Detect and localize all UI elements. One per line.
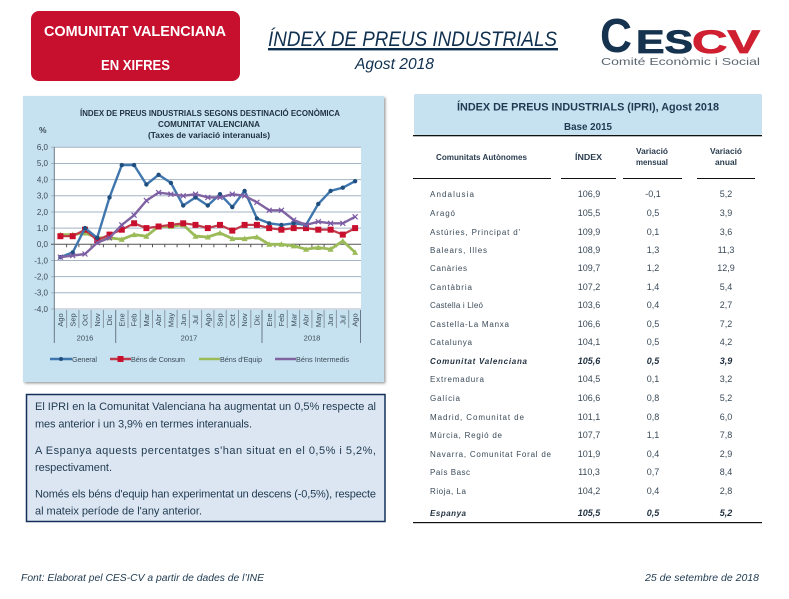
series: Béns d'Equip: [60, 225, 355, 252]
row: Aragó: 105,5: [578, 208, 600, 218]
row: Madrid: 101,1: [578, 412, 600, 422]
x axis month labels: Ago: [56, 313, 65, 327]
row: Múrcia: 7,8: [720, 430, 732, 440]
row: Astúries: [430, 227, 732, 237]
legend: Béns Intermedis: [296, 355, 349, 364]
x axis month labels: Jun: [179, 314, 188, 326]
row: Astúries: Astúries, Principat d': [430, 228, 520, 237]
y axis labels: 3,0: [37, 192, 49, 200]
row: Aragó: 3,9: [720, 208, 732, 218]
row: Comunitat Valenciana: 105,6: [578, 356, 601, 366]
row: País Basc: [430, 467, 732, 477]
series: Béns de Consum: [60, 223, 355, 240]
y axis labels: -1,0: [34, 256, 49, 266]
series: Béns Intermedis: [60, 193, 355, 257]
logo: CES CV: [600, 10, 761, 68]
date: 25 de setembre de 2018: [644, 572, 759, 584]
row: Espanya: 0,5: [647, 508, 660, 518]
row: Espanya: Espanya: [430, 509, 467, 518]
chart title: ÍNDEX DE PREUS INDUSTRIALS SEGONS DESTINACIÓ ECONÒMICA: [80, 109, 340, 118]
y axis labels: 4,0: [37, 176, 49, 184]
legend: [50, 355, 349, 364]
row: Castella-La Manxa: Castella-La Manxa: [430, 320, 510, 329]
row: País Basc: País Basc: [430, 468, 470, 477]
row: Balears: 1,3: [647, 245, 659, 255]
row: Extremadura: 3,2: [720, 374, 732, 384]
x axis month labels: Jul: [338, 315, 347, 325]
y axis labels: -4,0: [34, 305, 49, 314]
row: Comunitat Valenciana: 3,9: [720, 356, 732, 366]
table heading: [413, 94, 762, 136]
row: Aragó: [430, 208, 732, 218]
x axis month labels: Feb: [277, 314, 286, 326]
x axis month labels: Ago: [351, 313, 360, 327]
row: Andalusia: 106,9: [578, 189, 600, 199]
row: Aragó: Aragó: [430, 209, 456, 218]
title: [268, 28, 558, 73]
x axis month labels: Feb: [130, 314, 139, 326]
text block: summary: respectivament.: [35, 462, 112, 474]
row: Comunitat Valenciana: Comunitat Valenciana: [430, 357, 528, 366]
row: Espanya: 5,2: [720, 508, 732, 518]
text block: summary: [26, 394, 385, 522]
badge: Comunitat Valenciana en xifres: [31, 11, 240, 81]
row: Navarra: Navarra, Comunitat Foral de: [430, 450, 552, 459]
row: Aragó: 0,5: [647, 208, 659, 218]
row: Múrcia: 1,1: [647, 430, 659, 440]
row: Navarra: 0,4: [647, 449, 659, 459]
row: Rioja: [430, 486, 732, 496]
row: Madrid: [430, 412, 732, 422]
row: Múrcia: 107,7: [578, 430, 600, 440]
row: Andalusia: -0,1: [645, 189, 661, 199]
row: Balears: 11,3: [718, 245, 734, 255]
row: Comunitat Valenciana: [430, 356, 732, 366]
row: Castella i Lleó: 103,6: [578, 300, 600, 310]
y axis labels: 0,0: [37, 240, 49, 249]
y axis labels: 1,0: [37, 224, 49, 233]
x axis month labels: [56, 313, 360, 327]
column headers: [413, 147, 755, 179]
x axis month labels: Sep: [68, 313, 77, 327]
panel: line chart: [23, 96, 384, 382]
row: Galícia: 0,8: [647, 393, 659, 403]
x axis month labels: Oct: [228, 313, 237, 326]
row: Extremadura: 104,5: [578, 374, 600, 384]
x axis year labels: [77, 334, 320, 342]
row: Madrid: 6,0: [720, 412, 732, 422]
x axis month labels: Dic: [105, 314, 114, 325]
x axis month labels: Ago: [203, 313, 212, 327]
row: Castella-La Manxa: 0,5: [647, 319, 659, 329]
y axis labels: 2,0: [37, 208, 49, 217]
row: Balears: [430, 245, 734, 255]
text block: summary: al mateix període de l'any anterior.: [35, 506, 202, 518]
row: Navarra: [430, 449, 732, 459]
chart title: COMUNITAT VALENCIANA: [158, 120, 260, 129]
row: Castella i Lleó: 0,4: [647, 300, 659, 310]
row: País Basc: 8,4: [720, 467, 732, 477]
row: Cantàbria: 5,4: [720, 282, 732, 292]
row: Extremadura: 0,1: [647, 374, 659, 384]
row: Castella i Lleó: [430, 300, 732, 310]
y axis labels: -2,0: [34, 272, 49, 282]
x axis month labels: Abr: [154, 314, 163, 326]
row: Navarra: 2,9: [720, 449, 732, 459]
row: Catalunya: [430, 337, 732, 347]
row: Canàries: 109,7: [578, 263, 600, 273]
row: Rioja: 104,2: [578, 486, 600, 496]
row: Cantàbria: 107,2: [578, 282, 600, 292]
row: País Basc: 110,3: [578, 467, 600, 477]
row: Comunitat Valenciana: 0,5: [647, 356, 660, 366]
row: Rioja: 0,4: [647, 486, 659, 496]
text block: summary: El IPRI en la Comunitat Valenciana ha augmentat un 0,5% respecte al: [35, 401, 376, 413]
row: Balears: 108,9: [578, 245, 600, 255]
row: Catalunya: 104,1: [578, 337, 600, 347]
chart title: [80, 109, 340, 140]
row: Rioja: 2,8: [720, 486, 732, 496]
title: Agost 2018: [354, 56, 434, 73]
logo: CES CV: CV: [692, 24, 761, 60]
row: Canàries: [430, 263, 735, 273]
row: Canàries: 1,2: [647, 263, 659, 273]
x axis month labels: May: [314, 313, 323, 327]
row: Catalunya: 0,5: [647, 337, 659, 347]
row: Múrcia: [430, 430, 732, 440]
legend: General: [72, 355, 97, 364]
row: Canàries: 12,9: [717, 263, 735, 273]
row: Astúries: 109,9: [578, 227, 600, 237]
row: Cantàbria: Cantàbria: [430, 283, 473, 292]
row: Madrid: Madrid, Comunitat de: [430, 413, 525, 422]
row: Castella-La Manxa: 106,6: [578, 319, 600, 329]
axis unit: %: [39, 125, 47, 135]
text block: summary: Només els béns d'equip han experimentat un descens (-0,5%), respecte: [35, 488, 376, 500]
title: ÍNDEX DE PREUS INDUSTRIALS: [268, 28, 557, 51]
x axis month labels: Jul: [191, 315, 200, 325]
badge: Comunitat Valenciana en xifres: EN XIFRES: [101, 57, 170, 74]
x axis month labels: Sep: [216, 313, 225, 327]
chart title: (Taxes de variació interanuals): [148, 131, 270, 140]
row: Astúries: 0,1: [647, 227, 659, 237]
x axis month labels: Mar: [142, 313, 151, 326]
row: Extremadura: [430, 374, 732, 384]
column headers: Variació: [636, 147, 668, 156]
row: Canàries: Canàries: [430, 264, 467, 273]
table heading: ÍNDEX DE PREUS INDUSTRIALS (IPRI), Agost 2018: [457, 100, 719, 114]
row: País Basc: 0,7: [647, 467, 659, 477]
row: Galícia: [430, 393, 732, 403]
plot area: [54, 147, 361, 310]
column headers: Comunitats Autònomes: [436, 153, 528, 162]
text block: summary: A Espanya aquests percentatges s'han situat en el 0,5% i 5,2%,: [35, 445, 376, 457]
logo: CES CV: ES: [636, 24, 693, 60]
column headers: anual: [715, 158, 737, 167]
series: General: [60, 165, 355, 257]
row: Castella i Lleó: Castella i Lleó: [430, 301, 484, 310]
column headers: mensual: [636, 158, 668, 167]
row: Cantàbria: [430, 282, 732, 292]
source note: Font: Elaborat pel CES-CV a partir de dades de l’INE: [21, 572, 265, 584]
x axis month labels: Nov: [93, 313, 102, 327]
legend: Béns de Consum: [131, 355, 185, 364]
row: Catalunya: Catalunya: [430, 338, 473, 347]
y axis labels: [34, 143, 49, 314]
y axis labels: 5,0: [37, 159, 49, 168]
x axis month labels: Ene: [117, 313, 126, 327]
row: Múrcia: Múrcia, Regió de: [430, 431, 503, 440]
x axis month labels: Mar: [289, 313, 298, 326]
row: Balears: Balears, Illes: [430, 246, 487, 255]
logo: CES CV: Comité Econòmic i Social: [601, 56, 760, 68]
row: Andalusia: 5,2: [720, 189, 732, 199]
row: Castella-La Manxa: 7,2: [720, 319, 732, 329]
x axis month labels: Dic: [252, 314, 262, 325]
x axis month labels: May: [166, 313, 176, 327]
y axis labels: -3,0: [34, 288, 49, 298]
x axis year labels: 2017: [181, 334, 197, 342]
badge: Comunitat Valenciana en xifres: COMUNITAT VALENCIANA: [44, 23, 226, 40]
x axis month labels: Nov: [240, 313, 249, 327]
row: Andalusia: [430, 189, 732, 199]
row: Madrid: 0,8: [647, 412, 659, 422]
row: Extremadura: Extremadura: [430, 375, 485, 384]
row: Catalunya: 4,2: [720, 337, 732, 347]
row: Andalusia: Andalusia: [430, 190, 475, 199]
row: Cantàbria: 1,4: [647, 282, 659, 292]
row: Espanya: 105,5: [578, 508, 601, 518]
x axis month labels: Ene: [265, 313, 274, 327]
row: Rioja: Rioja, La: [430, 487, 467, 496]
x axis month labels: Abr: [302, 314, 311, 326]
legend: Béns d'Equip: [220, 355, 262, 364]
logo: CES CV: C: [600, 10, 632, 63]
row: Espanya: [430, 508, 732, 518]
x axis month labels: Oct: [81, 313, 90, 326]
table heading: Base 2015: [564, 122, 612, 133]
table: IPRI per comunitat: [413, 94, 762, 523]
row: Astúries: 3,6: [720, 227, 732, 237]
row: Castella-La Manxa: [430, 319, 732, 329]
x axis year labels: 2016: [77, 334, 93, 342]
row: Castella i Lleó: 2,7: [720, 300, 732, 310]
x axis year labels: 2018: [304, 334, 320, 342]
text block: summary: mes anterior i un 3,9% en termes interanuals.: [35, 418, 252, 430]
row: Galícia: Galícia: [430, 394, 461, 403]
y axis labels: 6,0: [37, 143, 49, 152]
column headers: Variació: [710, 147, 742, 156]
row: Galícia: 5,2: [720, 393, 732, 403]
row: Galícia: 106,6: [578, 393, 600, 403]
x axis month labels: Jun: [326, 314, 335, 326]
column headers: ÍNDEX: [575, 153, 603, 162]
row: Navarra: 101,9: [578, 449, 600, 459]
